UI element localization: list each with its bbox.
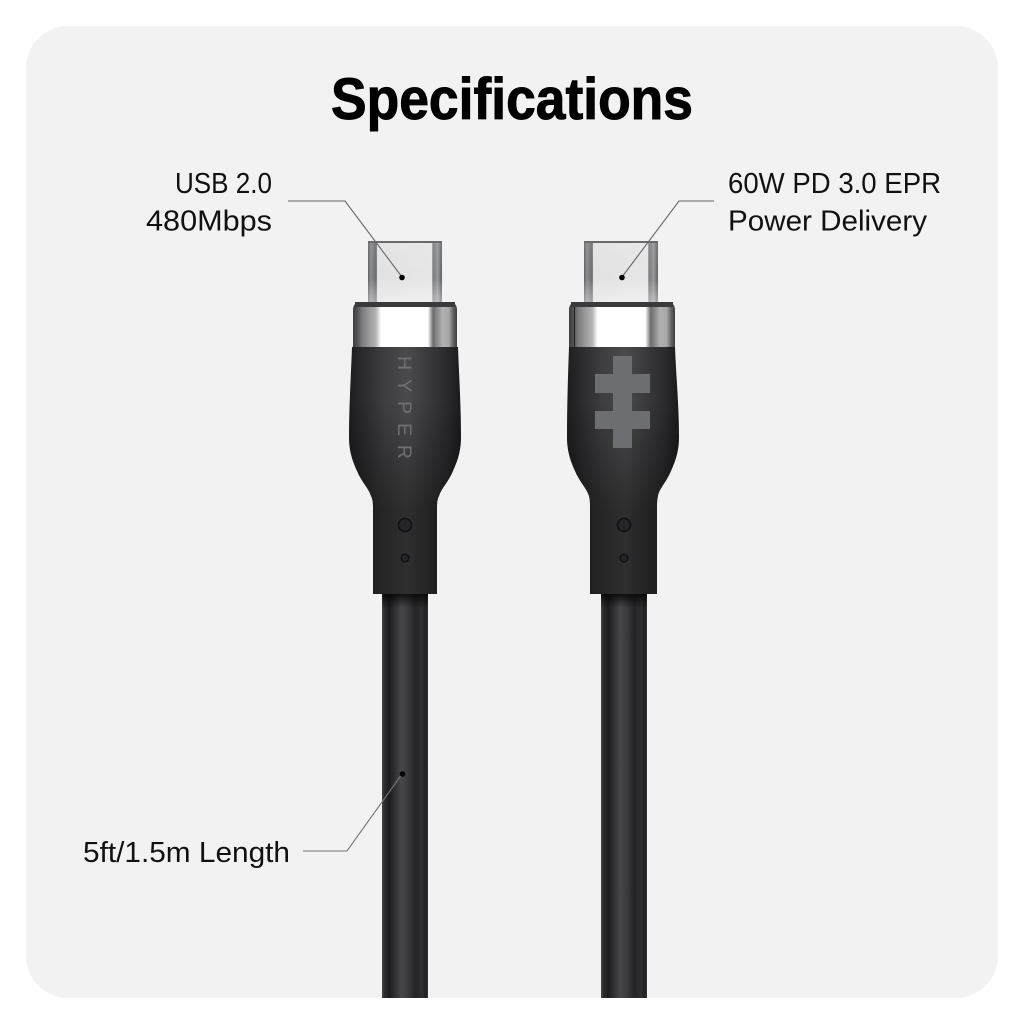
callout: length	[83, 771, 405, 869]
callout: USB 2.0	[146, 168, 405, 280]
right cable	[567, 241, 679, 998]
right USB-C plug	[584, 241, 658, 303]
label: 60W PD 3.0 EPR Power Delivery	[728, 168, 941, 238]
leader line: USB 2.0	[288, 201, 405, 280]
HYPER wordmark: HYPER	[393, 356, 415, 459]
right cable cord	[601, 590, 647, 998]
label: 5ft/1.5m Length: 5ft/1.5m Length	[83, 837, 290, 869]
right connector body	[567, 347, 679, 594]
label: USB 2.0 480Mbps: 480Mbps	[146, 206, 272, 238]
right strain relief dots	[618, 518, 630, 562]
left cable	[349, 241, 461, 998]
right metal collar	[569, 302, 675, 349]
left metal collar	[353, 302, 457, 349]
callout: power delivery	[619, 168, 941, 280]
title: Specifications	[331, 67, 693, 132]
left USB-C plug	[368, 241, 442, 303]
leader line: power delivery	[619, 201, 714, 280]
label: 60W PD 3.0 EPR Power Delivery: 60W PD 3.0 EPR	[728, 168, 941, 200]
left connector body	[349, 347, 461, 594]
label: USB 2.0 480Mbps: USB 2.0	[175, 168, 272, 200]
label: USB 2.0 480Mbps	[146, 168, 272, 238]
label: 60W PD 3.0 EPR Power Delivery: Power Delivery	[728, 206, 928, 238]
leader line: length	[303, 771, 405, 851]
left strain relief dots	[398, 518, 412, 562]
left cable cord	[382, 590, 428, 998]
icon: Hyper logo	[595, 356, 650, 448]
